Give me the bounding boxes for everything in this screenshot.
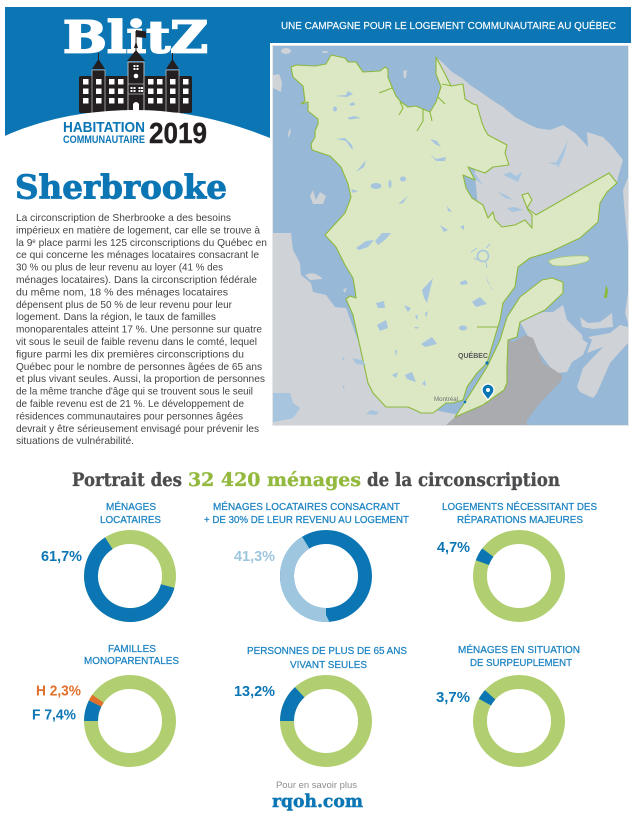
- riding title: Sherbrooke: [15, 168, 227, 206]
- donut: ménages en situation de surpeuplement: 3,7%: [436, 689, 470, 706]
- section heading: Portrait des: [72, 470, 182, 491]
- land around Québec: [273, 48, 629, 426]
- body paragraph: impérieux en matière de logement, car elle se trouve à: [16, 225, 260, 236]
- donut: ménages locataires: 61,7%: [41, 548, 82, 565]
- website link: rqoh.com: [272, 791, 363, 812]
- body paragraph: logement. Dans la région, le taux de familles: [16, 312, 216, 323]
- Anticosti island: [548, 256, 589, 266]
- logo: Blitz Habitation Communautaire 2019: COMMUNAUTAIRE: [63, 134, 145, 146]
- donut: personnes de plus de 65 ans vivant seules: [234, 645, 407, 760]
- body paragraph: de la même tranche d'âge qui se trouvent sous le seuil: [16, 387, 253, 398]
- body paragraph: 30 % ou plus de leur revenu au loyer (41 % des: [16, 263, 223, 274]
- body paragraph: figure parmi les dix premières circonscriptions du: [16, 349, 244, 360]
- donut: ménages consacrant plus de 30% au logement: [204, 500, 410, 615]
- donut: familles monoparentales: H 2,3%: [36, 682, 81, 700]
- donut: familles monoparentales: F 7,4%: [32, 706, 76, 724]
- icon: Sherbrooke location pin: [482, 384, 494, 400]
- body paragraph: La circonscription de Sherbrooke a des besoins: [16, 213, 231, 224]
- section heading: [72, 470, 560, 491]
- donut: ménages en situation de surpeuplement: MÉNAGES EN SITUATION: [458, 643, 580, 656]
- donut: logements nécessitant des réparations majeures: LOGEMENTS NÉCESSITANT DES: [442, 500, 597, 513]
- lakes: [273, 91, 568, 422]
- footer call to action: [272, 780, 363, 812]
- donut: logements nécessitant des réparations majeures: [437, 500, 597, 626]
- donut: familles monoparentales: [32, 643, 182, 773]
- donut: personnes de plus de 65 ans vivant seules: 13,2%: [234, 683, 275, 700]
- section heading: de la circonscription: [367, 470, 560, 491]
- marker: Montréal: [464, 401, 466, 403]
- logo wordmark: BlitZ: [63, 12, 208, 64]
- marker: Québec city: [485, 361, 489, 365]
- donut: ménages locataires: MÉNAGES: [106, 500, 156, 513]
- highlighted household count: 32 420 ménages: [188, 470, 361, 491]
- body paragraph: dépensent plus de 50 % de leur revenu pour leur: [16, 300, 233, 311]
- body paragraph: et plus vivant seules. Aussi, la proportion de personnes: [16, 374, 265, 385]
- header banner: [5, 7, 631, 138]
- donut: logements nécessitant des réparations majeures: RÉPARATIONS MAJEURES: [457, 513, 583, 526]
- white hill: [5, 110, 270, 150]
- body paragraph: résidences communautaires pour personnes âgées: [16, 411, 243, 422]
- donut: personnes de plus de 65 ans vivant seules: VIVANT SEULES: [290, 659, 367, 671]
- logo year: 2019: [149, 118, 207, 150]
- body paragraph: vit sous le seuil de faible revenu dans le comté, lequel: [16, 337, 257, 348]
- rivers and coast details: [379, 84, 498, 327]
- label: Québec city: QUÉBEC: [458, 351, 489, 360]
- body paragraph: e: [32, 239, 36, 245]
- body paragraph: de faible revenu est de 21 %. Le développement de: [16, 399, 244, 410]
- body paragraph: ménages locataires). Dans la circonscription fédérale: [16, 275, 257, 286]
- campaign tagline: UNE CAMPAGNE POUR LE LOGEMENT COMMUNAUTAIRE AU QUÉBEC: [281, 19, 616, 32]
- donut: ménages consacrant plus de 30% au logement: 41,3%: [234, 548, 275, 565]
- map of Québec: [272, 45, 629, 426]
- donut: personnes de plus de 65 ans vivant seules: PERSONNES DE PLUS DE 65 ANS: [247, 645, 407, 657]
- USA: [445, 335, 562, 426]
- Québec territory: [291, 55, 617, 413]
- donut: familles monoparentales: FAMILLES: [108, 643, 156, 655]
- logo: Blitz Habitation Communautaire 2019: [5, 12, 270, 150]
- donut: logements nécessitant des réparations majeures: 4,7%: [437, 539, 470, 556]
- donut: ménages locataires: LOCATAIRES: [100, 514, 161, 526]
- donut: ménages locataires: [41, 500, 178, 624]
- logo subtitle: HABITATION: [63, 119, 145, 136]
- Madeleine islands: [604, 285, 608, 298]
- body paragraph: place parmi les 125 circonscriptions du Québec en: [36, 238, 267, 249]
- label: Montréal: Montréal: [434, 397, 458, 403]
- donut: ménages consacrant plus de 30% au logement: + DE 30% DE LEUR REVENU AU LOGEMENT: [204, 514, 410, 526]
- donut: ménages en situation de surpeuplement: [436, 643, 580, 774]
- body paragraph: [16, 213, 267, 447]
- footer call to action: Pour en savoir plus: [276, 780, 357, 791]
- body paragraph: la 9: [16, 238, 32, 249]
- body paragraph: monoparentales atteint 17 %. Une personne sur quatre: [16, 325, 262, 336]
- body paragraph: Québec pour le nombre de personnes âgées de 65 ans: [16, 362, 262, 373]
- body paragraph: devrait y être sérieusement envisagé pour prévenir les: [16, 424, 259, 435]
- icon: castle building: [79, 30, 192, 113]
- body paragraph: situations de vulnérabilité.: [16, 436, 134, 447]
- body paragraph: ce qui concerne les ménages locataires consacrant le: [16, 250, 259, 261]
- donut: familles monoparentales: MONOPARENTALES: [84, 655, 179, 667]
- body paragraph: du même nom, 18 % des ménages locataires: [16, 287, 228, 298]
- donut: ménages en situation de surpeuplement: DE SURPEUPLEMENT: [470, 657, 573, 669]
- Gaspé and Estrie: [455, 278, 563, 417]
- donut: ménages consacrant plus de 30% au logement: MÉNAGES LOCATAIRES CONSACRANT: [213, 500, 401, 513]
